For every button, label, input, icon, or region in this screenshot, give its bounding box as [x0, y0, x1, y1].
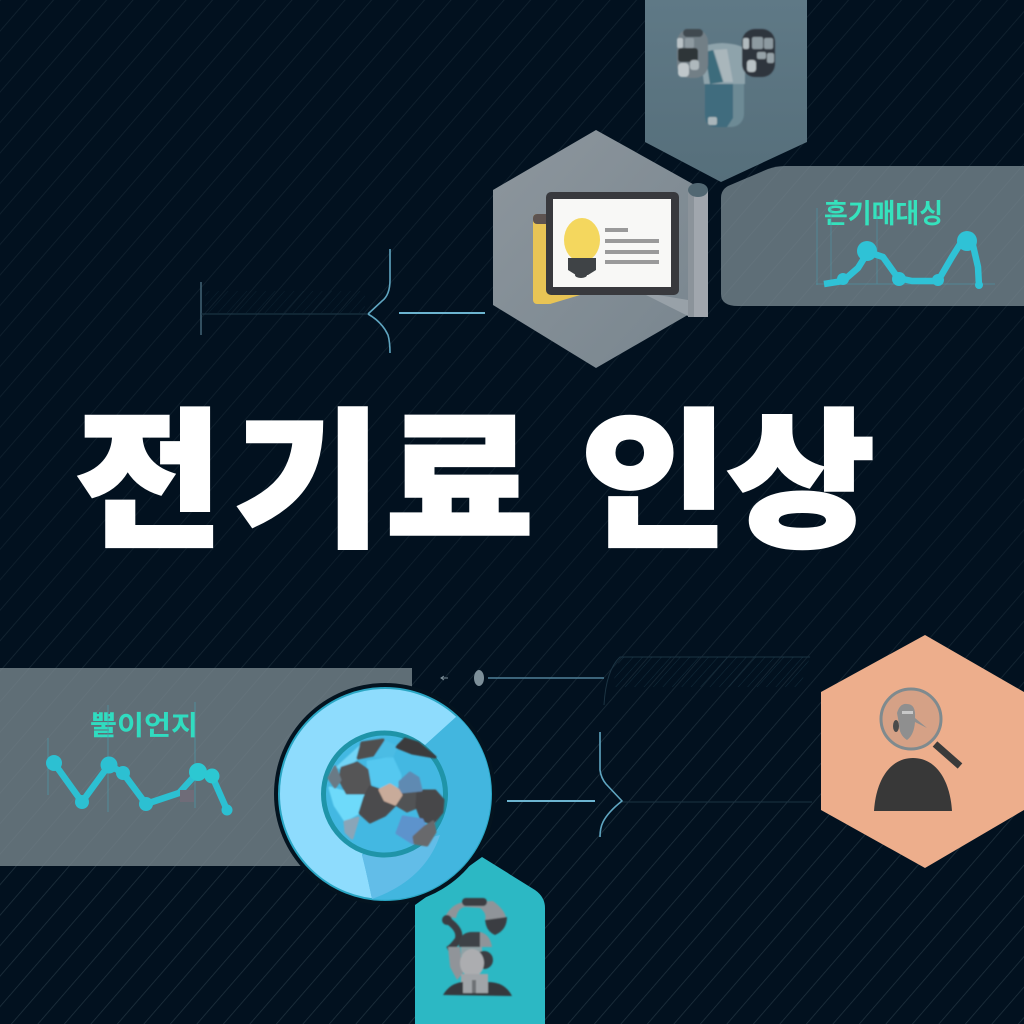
title: 전기료 인상: [0, 399, 874, 566]
icon: robotic device: [677, 29, 775, 127]
heading: chart label: 뿔이언지: [90, 711, 198, 741]
icon: person silhouette: [874, 758, 952, 811]
connector: bottom bracket and lines: [441, 657, 812, 837]
icon: tablet with bulb and text lines: [546, 192, 679, 295]
panel: orange hexagon with magnifier and person: [821, 635, 1024, 868]
heading: chart label: 흔기매대싱: [824, 199, 943, 229]
icon: magnifier: [881, 689, 960, 766]
icon: globe facets: [329, 739, 443, 845]
panel: top right chart card: [721, 166, 1024, 306]
panel: top pentagon with device icon: [645, 0, 807, 182]
icon: abstract figure: [442, 898, 512, 996]
panel: grey hexagon with tablet and bulb: [493, 130, 708, 368]
icon: central blue globe lens: [274, 683, 496, 905]
line chart: bottom left: [46, 702, 232, 816]
line chart: top right: [816, 205, 995, 289]
icon: side cylinder: [640, 183, 708, 317]
connector: top bracket and line: [201, 249, 485, 353]
icon: yellow book: [533, 214, 590, 304]
panel: bottom teal pentagon with figure: [415, 857, 545, 1024]
panel: bottom left chart card: [0, 668, 412, 866]
